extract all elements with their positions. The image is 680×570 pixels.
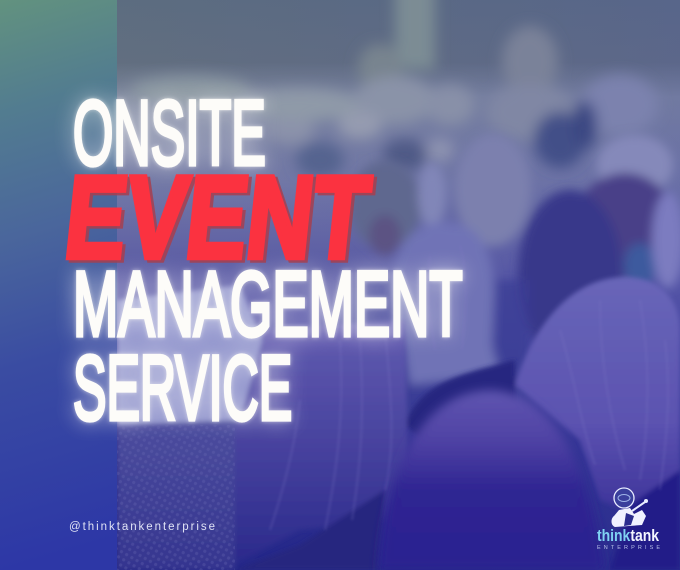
heading line: SERVICE: SERVICE — [73, 336, 292, 439]
social handle: @thinktankenterprise — [69, 521, 215, 533]
heading line: MANAGEMENT: MANAGEMENT — [73, 254, 463, 356]
logo wordmark: thinktank — [597, 526, 659, 545]
left colour strip — [0, 0, 117, 570]
icon: globe and tank — [612, 488, 648, 527]
title: ONSITE MANAGEMENT SERVICE glowing white lines — [73, 81, 463, 439]
logo: think tank enterprise — [597, 488, 660, 551]
logo tagline: ENTERPRISE — [597, 545, 660, 551]
heading word: EVENT in red italic with shadow: EVENT — [59, 153, 375, 283]
heading line: ONSITE: ONSITE — [73, 81, 266, 184]
heading word: EVENT in red italic with shadow: EVENT — [62, 155, 378, 286]
